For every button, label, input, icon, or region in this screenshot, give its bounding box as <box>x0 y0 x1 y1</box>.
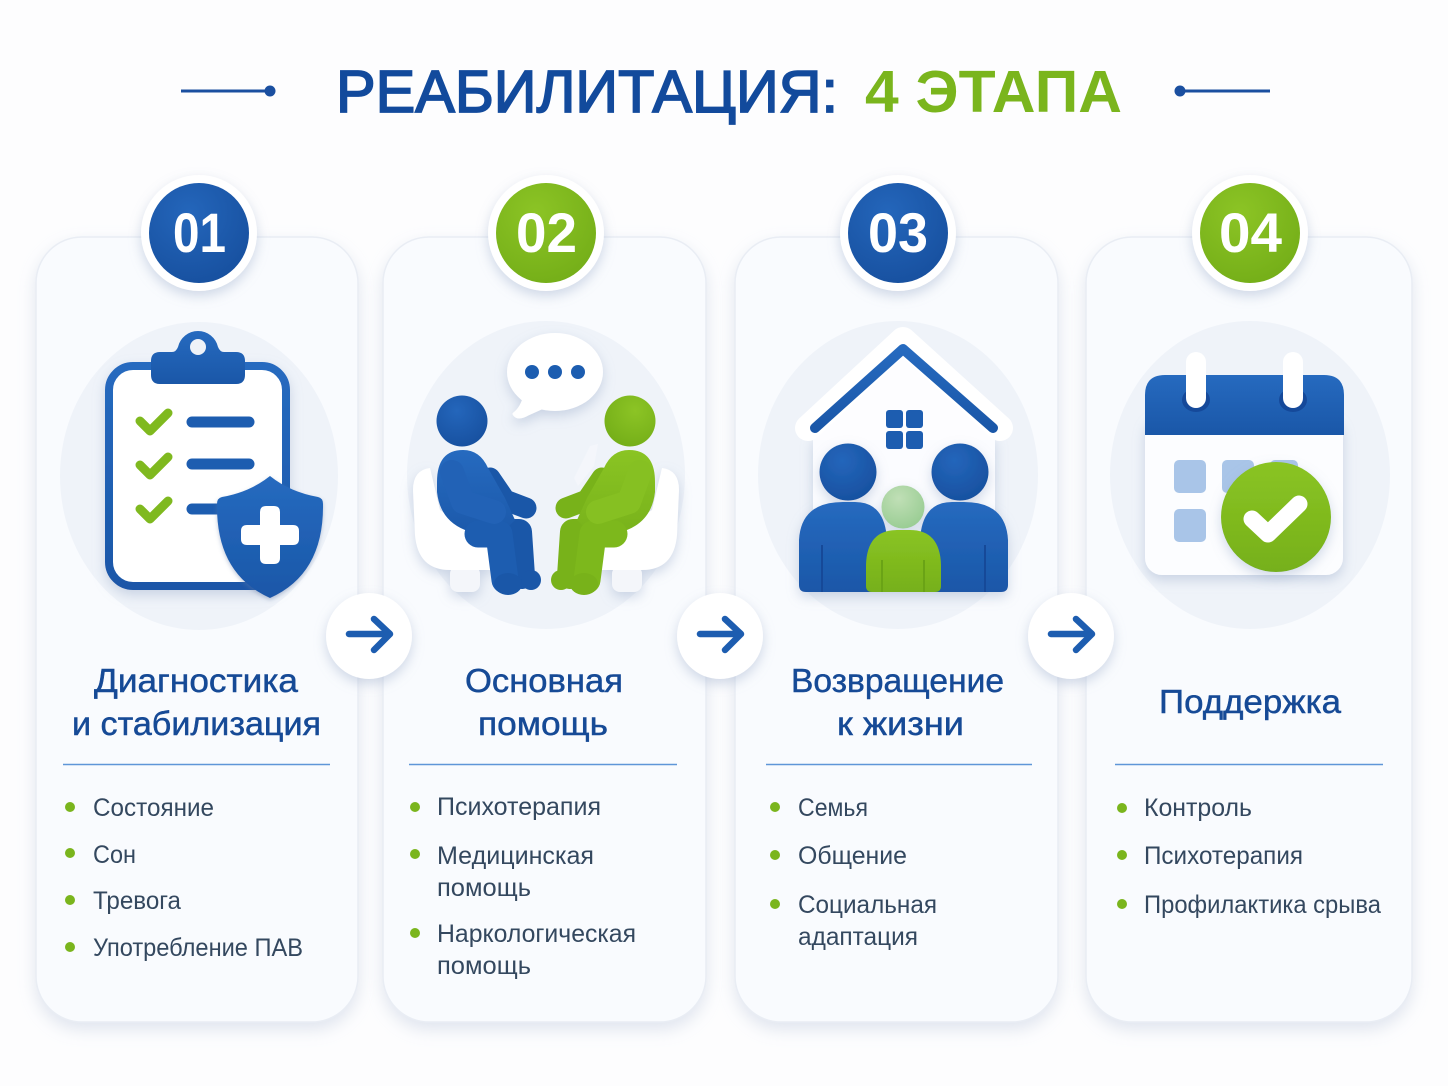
heading: к жизни <box>837 705 964 742</box>
number badge 02 <box>488 175 604 291</box>
list: Тревога <box>93 887 181 915</box>
heading <box>791 662 1004 742</box>
number badge 01 <box>141 175 257 291</box>
panel: step 4 <box>1086 175 1412 1022</box>
house <box>808 340 1000 575</box>
list <box>410 793 636 980</box>
list: Употребление ПАВ <box>93 934 303 962</box>
heading: Основная <box>465 662 623 699</box>
list: Общение <box>798 842 907 870</box>
arrow: step 2 to 3 <box>677 593 763 679</box>
heading: Диагностика <box>94 662 299 699</box>
heading: и стабилизация <box>72 705 321 742</box>
card background <box>383 237 706 1022</box>
list: Семья <box>798 794 868 822</box>
number badge 03 <box>840 175 956 291</box>
divider <box>63 764 330 766</box>
list: Наркологическая <box>437 920 636 948</box>
panel: step 2 <box>383 175 706 1022</box>
arrow: step 1 to 2 <box>326 593 412 679</box>
number badge 02: 02 <box>516 201 577 264</box>
title decoration: right line <box>1174 86 1270 96</box>
number badge 01: 01 <box>173 201 226 264</box>
list: Контроль <box>1144 794 1252 822</box>
heading: Поддержка <box>1159 683 1342 720</box>
list: Психотерапия <box>1144 842 1303 870</box>
card background <box>735 237 1058 1022</box>
title text: blue part: РЕАБИЛИТАЦИЯ: <box>336 59 838 125</box>
list: адаптация <box>798 923 918 951</box>
list <box>1117 794 1381 919</box>
number badge 03: 03 <box>868 201 928 264</box>
divider <box>1115 764 1383 766</box>
icon: clipboard with shield <box>60 322 338 630</box>
heading <box>465 662 623 742</box>
heading: помощь <box>478 705 608 742</box>
list: Сон <box>93 841 136 869</box>
heading: Возвращение <box>791 662 1004 699</box>
family members <box>799 444 1008 592</box>
icon: calendar with check <box>1110 321 1390 629</box>
title decoration: left line <box>181 86 276 96</box>
panel: step 1 <box>36 175 358 1022</box>
panel: step 3 <box>735 175 1058 1022</box>
card background <box>36 237 358 1022</box>
list: Медицинская <box>437 842 594 870</box>
list: Состояние <box>93 794 214 822</box>
list: помощь <box>437 952 531 980</box>
list: Социальная <box>798 891 937 919</box>
list <box>65 794 303 962</box>
speech bubble <box>507 333 603 417</box>
list: Профилактика срыва <box>1144 891 1381 919</box>
list: помощь <box>437 874 531 902</box>
list: Психотерапия <box>437 793 601 821</box>
heading <box>72 662 321 742</box>
number badge 04: 04 <box>1219 201 1282 264</box>
arrow: step 3 to 4 <box>1028 593 1114 679</box>
person right with chair <box>551 396 679 595</box>
list <box>770 794 937 951</box>
icon: two people talking <box>407 321 685 629</box>
title text: green part: 4 ЭТАПА <box>865 59 1122 125</box>
number badge 04 <box>1192 175 1308 291</box>
icon: family at home <box>758 321 1038 629</box>
person left with chair <box>413 396 541 595</box>
card background <box>1086 237 1412 1022</box>
divider <box>766 764 1032 766</box>
divider <box>409 764 677 766</box>
title <box>181 59 1270 125</box>
